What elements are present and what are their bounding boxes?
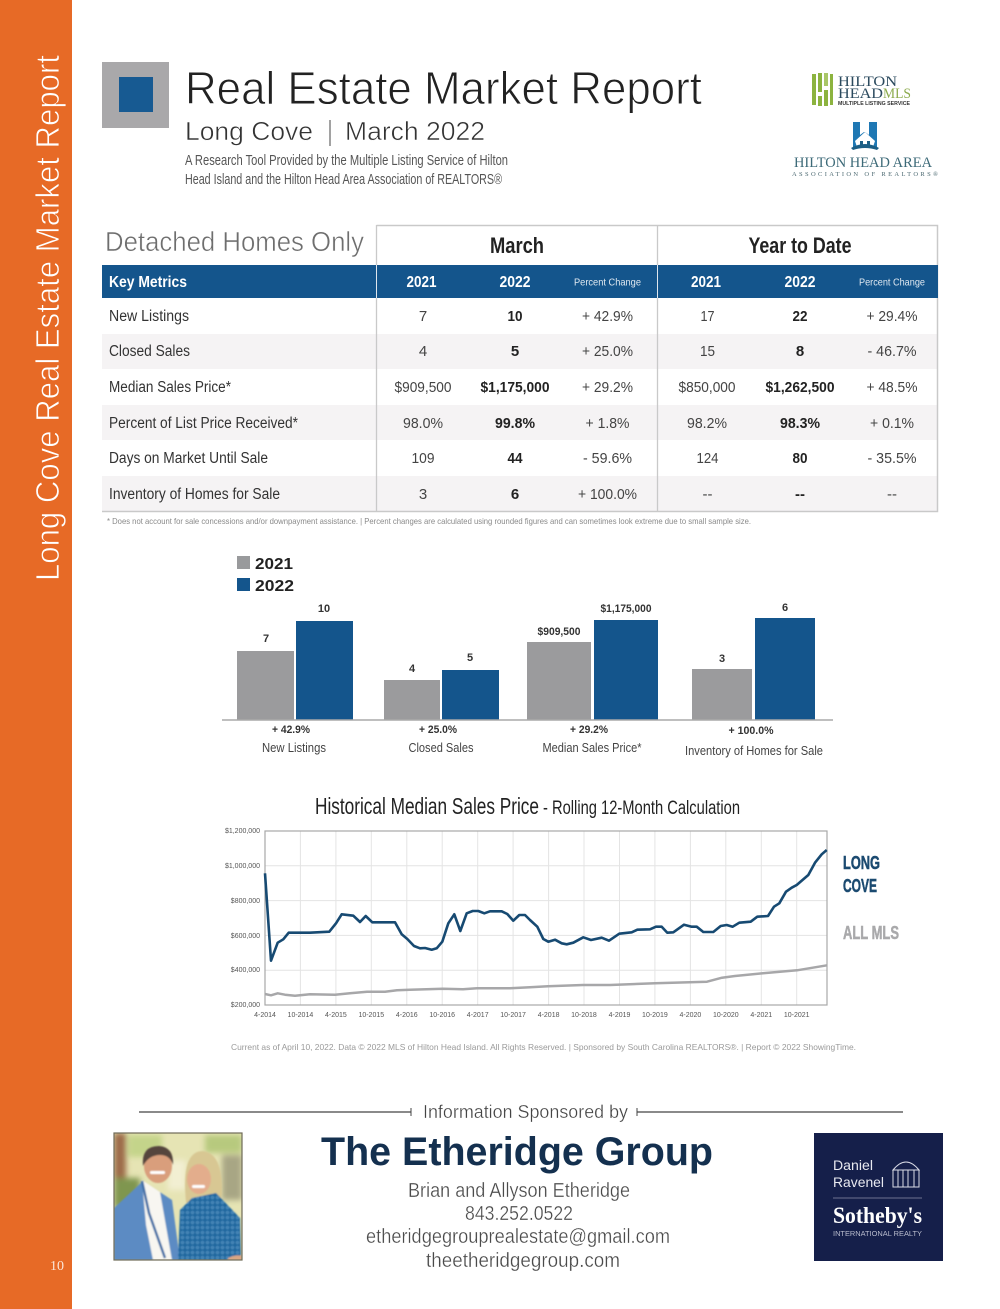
chart source note: Current as of April 10, 2022. Data © 2022 MLS of Hilton Head Island. All Rights Reserved. | Sponsored by South Carolina REALTORS®. | Report © 2022 ShowingTime.: [231, 1042, 856, 1052]
table header row: 2021: [406, 274, 437, 291]
table header row: Percent Change: [574, 276, 641, 288]
logo: Hilton Head MLS: HEAD: [838, 86, 883, 102]
bars: Closed Sales: 5: [467, 652, 473, 664]
row: New Listings: 22: [792, 308, 808, 325]
row: Percent of List Price Received: 99.8%: [495, 415, 535, 432]
row: Days on Market Until Sale: 44: [508, 450, 523, 467]
bars: Inventory of Homes for Sale: [685, 602, 823, 758]
logo: Hilton Head MLS: MULTIPLE LISTING SERVICE: [838, 101, 910, 107]
row: Inventory of Homes for Sale: [109, 486, 897, 503]
sponsor contact details: [366, 1180, 670, 1272]
legend: 2022: [255, 578, 294, 595]
table group headers: March: [490, 233, 544, 258]
row: New Listings: 10: [508, 308, 522, 325]
row: New Listings: + 42.9%: [582, 308, 633, 325]
icon: columned building: [893, 1162, 919, 1187]
logo: Hilton Head MLS: HILTON: [838, 74, 898, 90]
panel: orange sidebar: [0, 0, 72, 1309]
heading: historical median sales price: Historical Median Sales Price: [315, 793, 539, 819]
row: Days on Market Until Sale: 80: [792, 450, 808, 467]
row: New Listings: 7: [419, 308, 427, 325]
row: Closed Sales: Closed Sales: [109, 343, 190, 360]
row: Percent of List Price Received: + 1.8%: [586, 415, 630, 432]
y axis labels: $400,000: [231, 967, 260, 974]
row: Inventory of Homes for Sale: --: [795, 486, 805, 503]
subtitle: March 2022: [345, 116, 485, 146]
bars: Closed Sales: + 25.0%: [419, 724, 457, 736]
row: Inventory of Homes for Sale: + 100.0%: [578, 486, 637, 503]
row: Median Sales Price: [109, 379, 918, 396]
x axis labels: 10-2020: [713, 1012, 739, 1019]
x axis labels: 10-2015: [358, 1012, 384, 1019]
sponsor contact details: 843.252.0522: [465, 1203, 573, 1225]
title: Real Estate Market Report: [185, 62, 702, 114]
logo: Daniel Ravenel Sotheby's International Realty: [814, 1133, 943, 1261]
sponsor heading with rules: [139, 1102, 903, 1122]
series label: Long Cove: [843, 853, 880, 896]
table header row: Percent Change: [859, 276, 925, 288]
description: A Research Tool Provided by the Multiple Listing Service of Hilton: [185, 153, 508, 169]
bars: Median Sales Price: $909,500: [538, 626, 580, 638]
x axis labels: 4-2018: [538, 1012, 560, 1019]
row: Percent of List Price Received: 98.3%: [780, 415, 820, 432]
table header row: 2022: [784, 274, 816, 291]
row: Percent of List Price Received: 98.0%: [403, 415, 443, 432]
row: Percent of List Price Received: Percent of List Price Received*: [109, 415, 298, 432]
row: Closed Sales: - 46.7%: [868, 343, 916, 360]
page number: 10: [50, 1259, 64, 1274]
row: Closed Sales: [109, 343, 916, 360]
x axis labels: 4-2014: [254, 1012, 276, 1019]
header block: [102, 62, 702, 188]
photo: Brian and Allyson Etheridge: [114, 1133, 242, 1260]
row: Closed Sales: + 25.0%: [582, 343, 633, 360]
bars: Median Sales Price: + 29.2%: [570, 724, 608, 736]
heading: historical median sales price: - Rolling 12-Month Calculation: [543, 798, 740, 819]
row: Days on Market Until Sale: 109: [412, 450, 434, 467]
icon: grey and blue square: [102, 62, 169, 128]
table group headers: Year to Date: [748, 233, 852, 258]
y axis labels: $800,000: [231, 898, 260, 905]
sponsor contact details: etheridgegrouprealestate@gmail.com: [366, 1226, 670, 1248]
logo: Hilton Head Area Association of Realtors: ASSOCIATION OF REALTORS®: [792, 171, 938, 178]
row: Inventory of Homes for Sale: Inventory of Homes for Sale: [109, 486, 280, 503]
logo: Daniel Ravenel Sotheby's International Realty: Sotheby's: [833, 1203, 922, 1228]
x axis labels: 4-2019: [609, 1012, 631, 1019]
series label: Long Cove: COVE: [843, 876, 877, 896]
logo: Hilton Head Area Association of Realtors: HILTON HEAD AREA: [794, 155, 933, 171]
row: Median Sales Price: + 29.2%: [582, 379, 633, 396]
logo: Daniel Ravenel Sotheby's International Realty: Ravenel: [833, 1174, 884, 1190]
x axis labels: 4-2017: [467, 1012, 489, 1019]
row: New Listings: [109, 308, 918, 325]
row: Median Sales Price: $1,175,000: [480, 379, 550, 396]
bars: Inventory of Homes for Sale: 3: [719, 653, 725, 665]
bars: Closed Sales: Closed Sales: [408, 741, 474, 755]
row: Closed Sales: 5: [511, 343, 519, 360]
bars: Closed Sales: [384, 652, 499, 755]
row: Inventory of Homes for Sale: 6: [511, 486, 519, 503]
table header row: [102, 265, 938, 298]
logo: Daniel Ravenel Sotheby's International Realty: Daniel: [833, 1157, 873, 1173]
subtitle: [185, 116, 485, 146]
sponsor name: The Etheridge Group: [321, 1130, 713, 1174]
y axis labels: [225, 828, 260, 1009]
row: Median Sales Price: $1,262,500: [766, 379, 834, 396]
row: Inventory of Homes for Sale: --: [702, 486, 712, 503]
bars: Closed Sales: 4: [409, 663, 416, 675]
description: Head Island and the Hilton Head Area Association of REALTORS®: [185, 172, 502, 188]
row: Inventory of Homes for Sale: --: [887, 486, 897, 503]
bars: Median Sales Price: $1,175,000: [600, 603, 652, 615]
x axis labels: 10-2021: [784, 1012, 810, 1019]
x axis labels: 10-2019: [642, 1012, 668, 1019]
bars: Median Sales Price: Median Sales Price*: [542, 741, 642, 755]
y axis labels: $600,000: [231, 933, 260, 940]
row: New Listings: New Listings: [109, 308, 189, 325]
bars: New Listings: [237, 603, 353, 755]
bar chart: March 2021 vs 2022: [222, 556, 833, 758]
row: Median Sales Price: $909,500: [394, 379, 452, 396]
row: Median Sales Price: $850,000: [678, 379, 736, 396]
bars: Inventory of Homes for Sale: Inventory of Homes for Sale: [685, 744, 823, 758]
panel: key metrics table: [102, 225, 938, 512]
legend: [237, 556, 294, 595]
x axis labels: 4-2021: [750, 1012, 772, 1019]
logo: Hilton Head MLS: MLS: [883, 86, 911, 102]
heading: Detached Homes Only: Detached Homes Only: [105, 226, 364, 257]
line chart: historical median sales price: [225, 828, 899, 1019]
series label: All MLS: ALL MLS: [843, 923, 899, 943]
row: Percent of List Price Received: [109, 415, 914, 432]
table header row: Key Metrics: [109, 274, 187, 291]
table footnote: * Does not account for sale concessions and/or downpayment assistance. | Percent changes are calculated using rounded figures and can sometimes look extreme due to small sample size.: [107, 516, 751, 526]
row: Percent of List Price Received: 98.2%: [687, 415, 727, 432]
sponsor contact details: theetheridgegroup.com: [426, 1250, 620, 1272]
x axis labels: [254, 1012, 810, 1019]
table header row: 2022: [500, 274, 531, 291]
sponsor heading with rules: Information Sponsored by: [423, 1102, 628, 1122]
x axis labels: 10-2017: [500, 1012, 526, 1019]
x axis labels: 4-2016: [396, 1012, 418, 1019]
bars: Inventory of Homes for Sale: + 100.0%: [728, 725, 774, 737]
y axis labels: $1,200,000: [225, 828, 260, 835]
x axis labels: 4-2015: [325, 1012, 347, 1019]
x axis labels: 10-2016: [429, 1012, 455, 1019]
row: New Listings: + 29.4%: [866, 308, 918, 325]
sponsor contact details: Brian and Allyson Etheridge: [408, 1180, 630, 1202]
bars: New Listings: 7: [263, 633, 269, 645]
bars: New Listings: New Listings: [262, 741, 326, 755]
x axis labels: 4-2020: [680, 1012, 701, 1019]
sidebar title: Long Cove Real Estate Market Report: [29, 55, 66, 581]
row: Percent of List Price Received: + 0.1%: [870, 415, 914, 432]
x axis labels: 10-2018: [571, 1012, 597, 1019]
row: Median Sales Price: + 48.5%: [866, 379, 918, 396]
legend: 2021: [255, 556, 293, 573]
y axis labels: $1,000,000: [225, 863, 260, 870]
bars: New Listings: 10: [318, 603, 330, 615]
line: All MLS: [265, 965, 827, 996]
bars: Median Sales Price: [527, 603, 658, 755]
row: Closed Sales: 4: [419, 343, 427, 360]
line: Long Cove: [265, 850, 827, 961]
logo: Daniel Ravenel Sotheby's International Realty: INTERNATIONAL REALTY: [833, 1231, 922, 1238]
table header row: 2021: [691, 274, 721, 291]
row: Days on Market Until Sale: Days on Market Until Sale: [109, 450, 268, 467]
row: Inventory of Homes for Sale: 3: [419, 486, 427, 503]
row: Days on Market Until Sale: - 35.5%: [868, 450, 916, 467]
series label: Long Cove: LONG: [843, 853, 880, 873]
subtitle: Long Cove: [185, 116, 313, 146]
y axis labels: $200,000: [231, 1002, 260, 1009]
logo: Hilton Head MLS: [812, 73, 911, 107]
description: [185, 153, 508, 188]
row: New Listings: 17: [700, 308, 714, 325]
bars: Inventory of Homes for Sale: 6: [782, 602, 788, 614]
table group headers: [490, 233, 852, 258]
woman: [185, 1151, 222, 1206]
row: Days on Market Until Sale: [109, 450, 916, 467]
man: [114, 1181, 180, 1260]
x axis labels: 10-2014: [288, 1012, 313, 1019]
logo: Hilton Head Area Association of Realtors: [792, 122, 938, 178]
row: Closed Sales: 8: [796, 343, 804, 360]
row: Closed Sales: 15: [700, 343, 715, 360]
row: Median Sales Price: Median Sales Price*: [109, 379, 231, 396]
row: Days on Market Until Sale: 124: [696, 450, 718, 467]
row: Days on Market Until Sale: - 59.6%: [583, 450, 632, 467]
bars: New Listings: + 42.9%: [272, 724, 310, 736]
